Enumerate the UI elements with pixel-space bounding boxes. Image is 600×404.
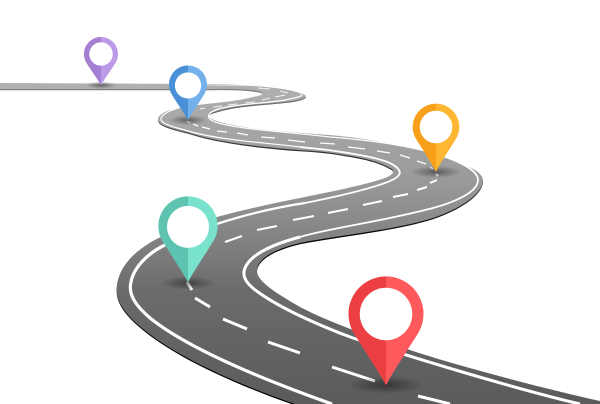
pin: orange [411,104,461,178]
pin: purple [84,37,118,89]
road [0,83,600,404]
road rim shadow [0,84,600,404]
centre dashes far section [187,88,433,169]
white edge lines [130,85,580,404]
pin: blue [169,65,207,125]
pin: red [348,276,424,394]
road surface [0,83,600,404]
centre dashes middle section [225,174,438,242]
centre dashes near section [187,282,450,404]
pin: teal [158,196,218,290]
